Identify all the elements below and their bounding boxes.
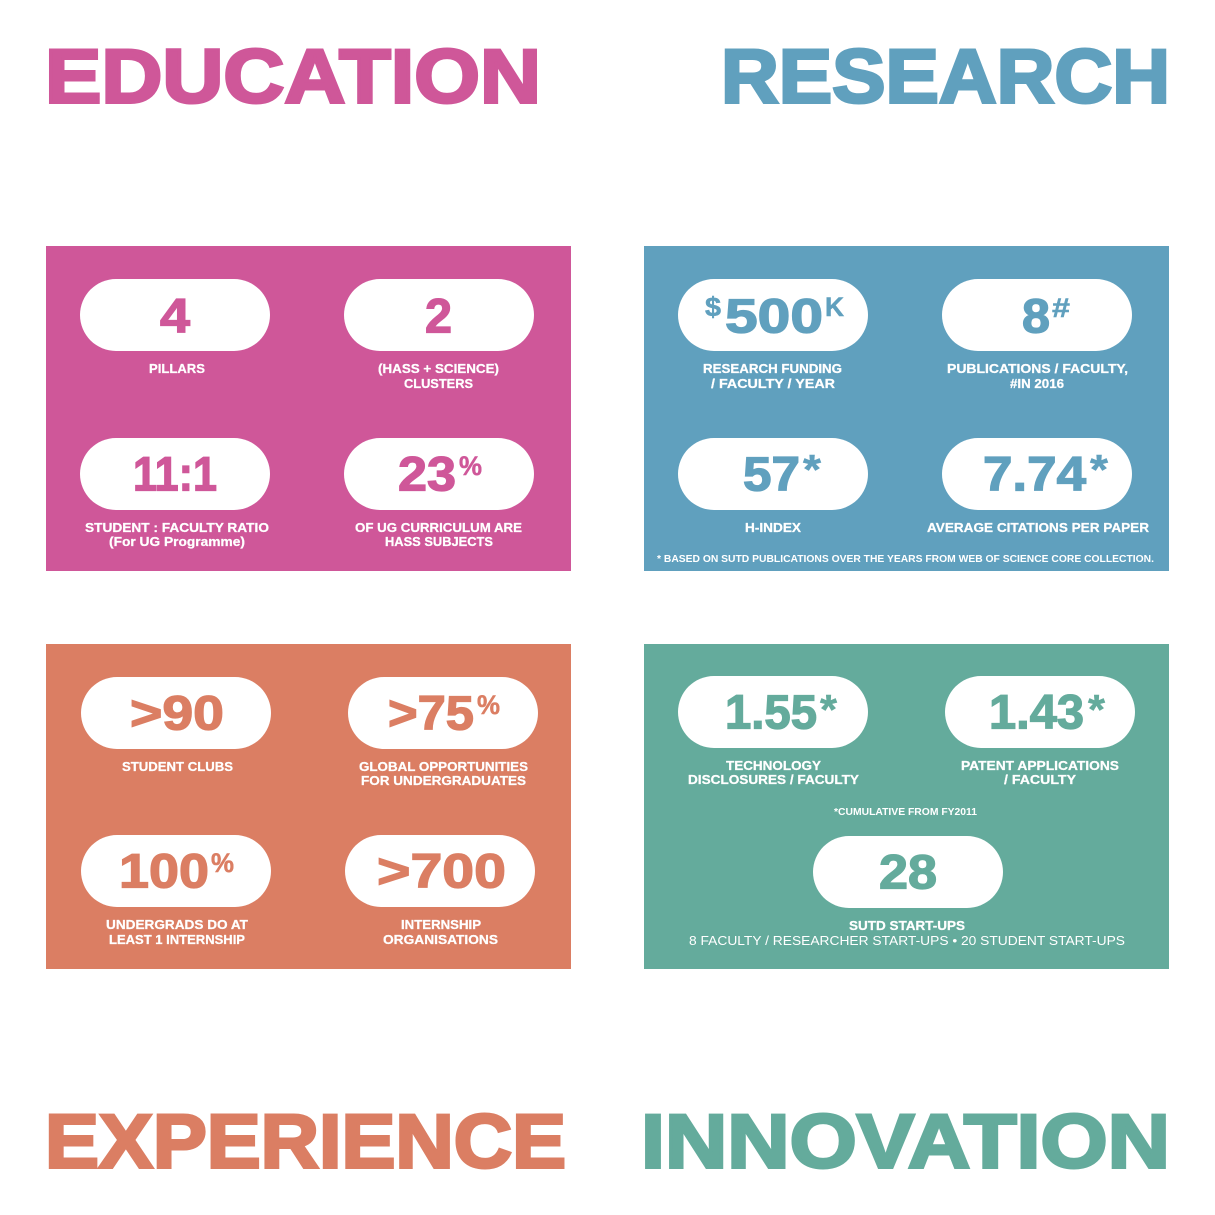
- stat: 23 percent: %: [459, 451, 482, 481]
- stat: over 90 clubs: STUDENT CLUBS: [122, 760, 233, 774]
- stat: 4 pillars: PILLARS: [149, 362, 205, 376]
- stat: 500K funding: RESEARCH FUNDING: [703, 362, 842, 376]
- title: experience: EXPERIENCE: [45, 1100, 566, 1184]
- stat: 1.43 patents: PATENT APPLICATIONS: [961, 759, 1119, 773]
- stat: 11:1 ratio: 11:1: [133, 448, 217, 502]
- title: innovation: INNOVATION: [641, 1100, 1170, 1184]
- stat: 2 clusters: 2: [425, 290, 452, 344]
- stat: 100 percent: %: [211, 848, 234, 878]
- stat: 4 pillars: 4: [160, 290, 190, 344]
- stat: over 90 clubs: [81, 677, 271, 774]
- stat: 7.74 citations: AVERAGE CITATIONS PER PAPER: [927, 521, 1149, 535]
- stat: 1.55 disclosures: *: [820, 686, 838, 733]
- stat: over 90 clubs: >90: [130, 688, 224, 740]
- stat: 1.43 patents: *: [1088, 686, 1106, 733]
- panel: innovation: [644, 644, 1169, 969]
- stat: 1.55 disclosures: DISCLOSURES / FACULTY: [688, 773, 860, 787]
- stat: 500K funding: 500: [725, 290, 823, 344]
- panel: experience: [46, 644, 571, 969]
- stat: over 75 percent: FOR UNDERGRADUATES: [361, 774, 526, 788]
- stat: 1.55 disclosures: TECHNOLOGY: [726, 759, 822, 773]
- stat: 8 publications: #: [1052, 293, 1070, 323]
- stat: 7.74 citations: 7.74: [983, 448, 1086, 502]
- title: education: EDUCATION: [45, 34, 541, 120]
- stat: 11:1 ratio: [80, 438, 270, 549]
- stat: 8 publications: 8: [1022, 290, 1050, 344]
- stat: 23 percent: [344, 438, 534, 549]
- stat: 100 percent: 100: [119, 846, 209, 898]
- panel: research: [644, 246, 1169, 571]
- stat: 7.74 citations: *: [1090, 446, 1109, 493]
- stat: 11:1 ratio: STUDENT : FACULTY RATIO: [85, 521, 269, 535]
- stat: 500K funding: / FACULTY / YEAR: [711, 377, 835, 391]
- footnote: research: * BASED ON SUTD PUBLICATIONS OVER THE YEARS FROM WEB OF SCIENCE CORE COLLECTION.: [657, 554, 1154, 565]
- stat: 1.43 patents: 1.43: [989, 686, 1084, 740]
- stat: 8 publications: #IN 2016: [1010, 377, 1064, 391]
- stat: over 75 percent: GLOBAL OPPORTUNITIES: [359, 760, 528, 774]
- stat: 7.74 citations: [927, 438, 1149, 535]
- stat: 8 publications: PUBLICATIONS / FACULTY,: [947, 362, 1128, 376]
- stat: 500K funding: $: [705, 292, 721, 322]
- stat: 23 percent: 23: [398, 448, 456, 502]
- stat: 23 percent: OF UG CURRICULUM ARE: [355, 521, 522, 535]
- stat: over 700 organisations: >700: [377, 846, 506, 898]
- stat: over 700 organisations: ORGANISATIONS: [383, 933, 498, 947]
- stat: over 75 percent: %: [477, 690, 500, 720]
- stat: 23 percent: HASS SUBJECTS: [385, 535, 493, 549]
- stat: 57 h-index: 57: [743, 448, 800, 502]
- stat: over 75 percent: [348, 677, 538, 788]
- stat: 500K funding: K: [825, 292, 844, 322]
- stat: 28 start-ups: 8 FACULTY / RESEARCHER START-UPS • 20 STUDENT START-UPS: [689, 934, 1125, 948]
- stat: 1.43 patents: / FACULTY: [1004, 773, 1077, 787]
- stat: 100 percent: [81, 835, 271, 947]
- footnote: innovation: *CUMULATIVE FROM FY2011: [834, 807, 977, 818]
- stat: over 75 percent: >75: [388, 688, 474, 740]
- stat: 2 clusters: CLUSTERS: [404, 377, 473, 391]
- stat: 28 start-ups: SUTD START-UPS: [849, 919, 965, 933]
- stat: 1.55 disclosures: 1.55: [725, 686, 817, 740]
- stat: 57 h-index: H-INDEX: [745, 521, 802, 535]
- stat: 57 h-index: [678, 438, 868, 535]
- stat: 100 percent: UNDERGRADS DO AT: [106, 918, 248, 932]
- stat: over 700 organisations: [345, 835, 535, 947]
- stat: 1.43 patents: [945, 676, 1135, 787]
- stat: 2 clusters: [344, 279, 534, 391]
- stat: 500K funding: [678, 279, 868, 391]
- stat: 100 percent: LEAST 1 INTERNSHIP: [109, 933, 245, 947]
- stat: 28 start-ups: 28: [879, 846, 937, 900]
- stat: 11:1 ratio: (For UG Programme): [109, 535, 245, 549]
- stat: 4 pillars: [80, 279, 270, 376]
- stat: over 700 organisations: INTERNSHIP: [401, 918, 481, 932]
- title: research: RESEARCH: [721, 34, 1170, 120]
- stat: 1.55 disclosures: [678, 676, 868, 787]
- stat: 2 clusters: (HASS + SCIENCE): [378, 362, 499, 376]
- stat: 57 h-index: *: [803, 446, 822, 493]
- stat: 8 publications: [942, 279, 1132, 391]
- stat: 28 start-ups: [689, 836, 1125, 948]
- panel: education: [46, 246, 571, 571]
